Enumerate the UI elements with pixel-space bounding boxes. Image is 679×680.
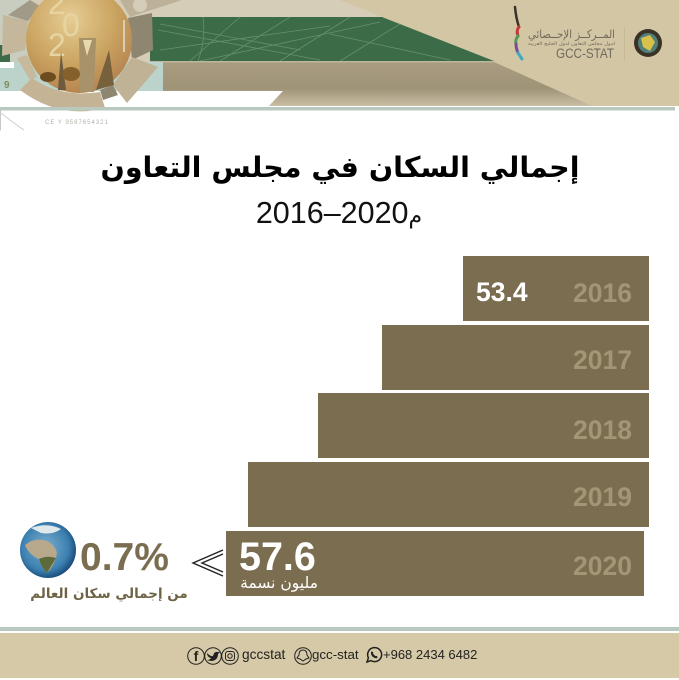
golden globe with skyline: 0 <box>62 7 80 43</box>
white band with slanted end <box>0 91 283 107</box>
footer band <box>0 633 679 678</box>
icon: whatsapp <box>366 646 382 664</box>
phone number: +968 2434 6482 <box>383 647 477 662</box>
bar 2017 <box>382 325 649 390</box>
unit label: مليون نسمة <box>240 574 318 592</box>
logo wordmark: GCC-STAT <box>556 46 614 61</box>
blue rule <box>0 107 675 110</box>
stat caption: من إجمالي سكان العالم <box>30 586 188 602</box>
stat 0.7%: 0.7% <box>80 536 169 579</box>
logo wordmark <box>528 27 616 61</box>
icons: social <box>187 647 312 665</box>
bar 2019 <box>248 462 649 527</box>
value 57.6: 57.6 <box>239 535 316 579</box>
subtitle: م2020–2016 <box>256 196 422 230</box>
header banner <box>0 0 679 130</box>
icons: social: f <box>194 648 199 664</box>
year 2019: 2019 <box>573 482 632 512</box>
logo wordmark: المــركــز الإحــصائي <box>528 27 615 42</box>
background tan <box>0 0 679 106</box>
logo emblem <box>634 29 662 57</box>
year 2017: 2017 <box>573 345 632 375</box>
handle gccstat: gccstat <box>242 647 285 662</box>
left pale tile <box>0 0 30 62</box>
bar 2020 <box>226 531 644 596</box>
footer rule <box>0 627 679 631</box>
value 53.4: 53.4 <box>476 277 528 307</box>
teal tile with digits <box>0 62 163 91</box>
logo wordmark: لدول مجلس التعاون لدول الخليج العربية <box>528 41 616 47</box>
golden globe with skyline: 2 <box>48 27 66 63</box>
title: إجمالي السكان في مجلس التعاون <box>101 151 579 184</box>
bar 2016 <box>463 256 649 321</box>
gauge digits: CE Y 9587654321 <box>45 120 109 126</box>
brown band <box>163 62 592 106</box>
icon: earth globe <box>20 522 76 578</box>
ring segments around globe <box>2 0 182 111</box>
handle gcc-stat: gcc-stat <box>312 647 359 662</box>
header banner: 9 <box>4 80 10 91</box>
year 2018: 2018 <box>573 415 632 445</box>
arrow: double chevron <box>191 549 224 577</box>
year 2020: 2020 <box>573 551 632 581</box>
top pale band <box>0 0 382 62</box>
logo ribbon <box>515 7 522 59</box>
golden globe with skyline <box>26 0 132 93</box>
year 2016: 2016 <box>573 278 632 308</box>
green band <box>150 17 494 62</box>
bar 2018 <box>318 393 649 458</box>
